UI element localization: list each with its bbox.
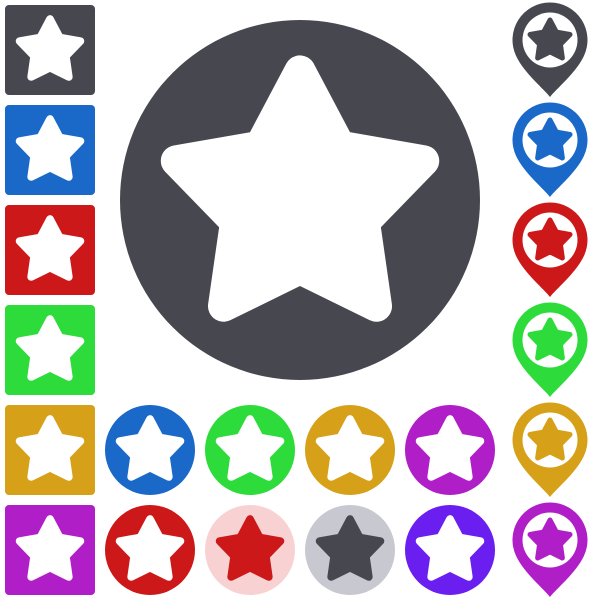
icon: red circle star	[105, 505, 195, 595]
icon: dark pin	[512, 2, 588, 97]
icon: purple pin	[512, 502, 588, 597]
icon: dark square star	[5, 5, 95, 95]
panel: circle icons row 1	[105, 405, 495, 495]
panel: map pins column	[512, 2, 588, 597]
icon: green square star	[5, 305, 95, 395]
icon: gold circle star	[305, 405, 395, 495]
icon: gray circle dark star	[305, 505, 395, 595]
panel: square icons column	[5, 5, 95, 595]
icon: purple circle star	[405, 405, 495, 495]
icon: red pin	[512, 202, 588, 297]
icon: pink circle red star	[205, 505, 295, 595]
icon: green pin	[512, 302, 588, 397]
icon: red square star	[5, 205, 95, 295]
panel: circle icons row 2	[105, 505, 495, 595]
icon: gold pin	[512, 402, 588, 497]
icon: blue circle star	[105, 405, 195, 495]
icon: violet circle star	[405, 505, 495, 595]
icon: big dark circle star	[120, 20, 480, 380]
icon: gold square star	[5, 405, 95, 495]
icon: green circle star	[205, 405, 295, 495]
icon: blue square star	[5, 105, 95, 195]
icon: blue pin	[512, 102, 588, 197]
icon: purple square star	[5, 505, 95, 595]
